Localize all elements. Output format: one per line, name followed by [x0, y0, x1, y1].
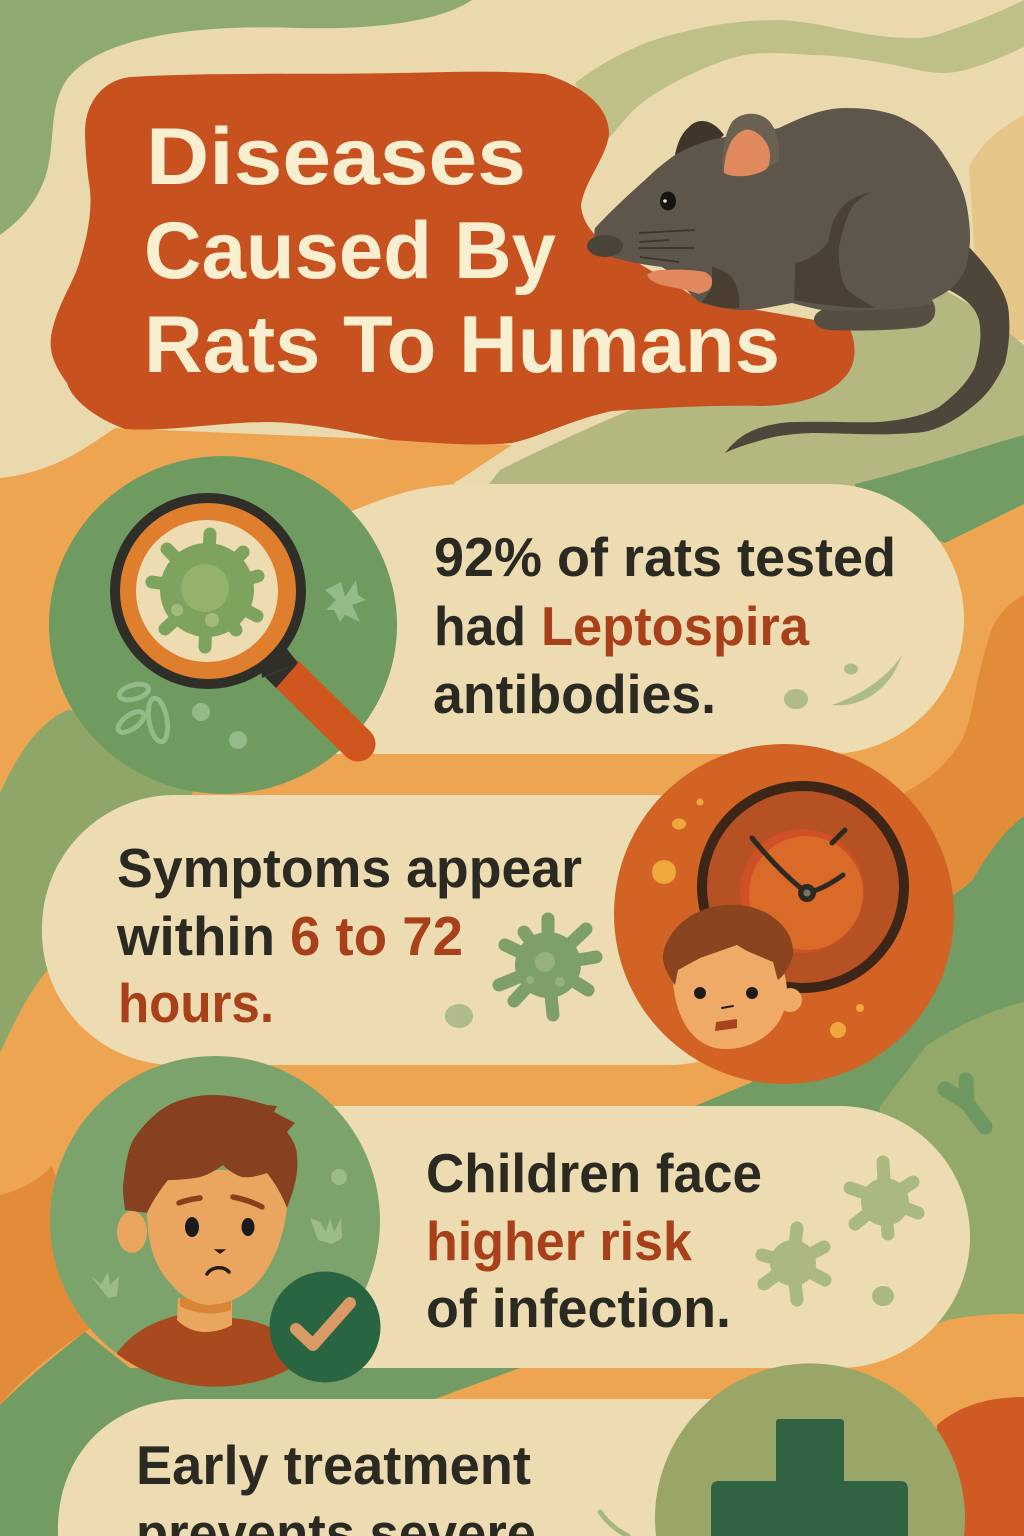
title: Diseases — [146, 112, 526, 202]
leaf specks — [91, 1169, 347, 1298]
card text: Children face — [426, 1142, 762, 1204]
panel: Leptospira card — [49, 456, 964, 794]
card pill — [230, 1106, 970, 1368]
neck — [177, 1298, 232, 1332]
decorative bone — [945, 1080, 985, 1127]
decorative specks — [784, 655, 902, 709]
title — [144, 112, 780, 390]
card pill — [42, 795, 802, 1065]
rat ear — [722, 114, 779, 174]
rat body — [594, 108, 970, 331]
panel: treatment card — [58, 1363, 965, 1536]
rat chest shadow — [702, 267, 739, 308]
card text: higher risk — [426, 1210, 692, 1272]
eyes — [185, 1217, 199, 1237]
card text — [433, 526, 896, 725]
leaf stem — [600, 1512, 628, 1536]
leaf specks — [115, 580, 366, 749]
rat tail — [725, 247, 1009, 453]
shirt — [117, 1315, 292, 1387]
card text: 92% of rats tested — [434, 526, 896, 588]
rat paw — [647, 270, 712, 294]
card pill — [260, 484, 964, 754]
icon: child — [117, 1095, 297, 1387]
icon: medical cross — [711, 1419, 908, 1536]
rat haunch shadow — [794, 192, 875, 308]
card text: Leptospira — [541, 595, 809, 657]
rat whiskers — [639, 230, 695, 262]
panel: children card — [50, 1056, 985, 1387]
circle badge — [50, 1056, 380, 1386]
card pill — [58, 1399, 800, 1536]
rat muzzle — [587, 235, 623, 257]
icon: child face — [663, 905, 802, 1049]
card text: within — [116, 905, 275, 967]
title blob — [51, 72, 855, 445]
specks — [652, 798, 864, 1038]
panel: symptoms card — [42, 744, 954, 1084]
icon: germ — [152, 534, 258, 647]
card text: Symptoms appear — [117, 837, 582, 899]
card text: had — [434, 595, 526, 657]
icon: magnifying glass — [115, 498, 358, 744]
face — [147, 1170, 287, 1305]
title: Caused By — [144, 206, 556, 296]
decorative germs — [762, 1162, 918, 1306]
rat eye — [660, 192, 676, 210]
icon: germ — [445, 919, 596, 1028]
nose and mouth — [216, 1250, 224, 1253]
hair — [123, 1095, 297, 1213]
circle badge — [49, 456, 397, 794]
eyebrows — [179, 1197, 262, 1207]
icon: check badge — [270, 1272, 380, 1382]
card text: antibodies. — [433, 663, 716, 725]
rat back ear — [675, 121, 724, 165]
rat hind foot — [814, 304, 934, 330]
card text: hours. — [118, 972, 274, 1034]
card text — [116, 837, 582, 1034]
title: Rats To Humans — [144, 300, 780, 390]
card text: of infection. — [426, 1277, 731, 1339]
card text: Early treatment — [136, 1434, 531, 1496]
card text — [426, 1142, 762, 1339]
icon: rat — [587, 108, 1009, 453]
circle badge — [614, 744, 954, 1084]
icon: clock — [702, 786, 904, 988]
ear — [117, 1211, 147, 1253]
card text — [136, 1434, 536, 1536]
circle badge — [655, 1363, 965, 1536]
card text: 6 to 72 — [290, 905, 463, 967]
